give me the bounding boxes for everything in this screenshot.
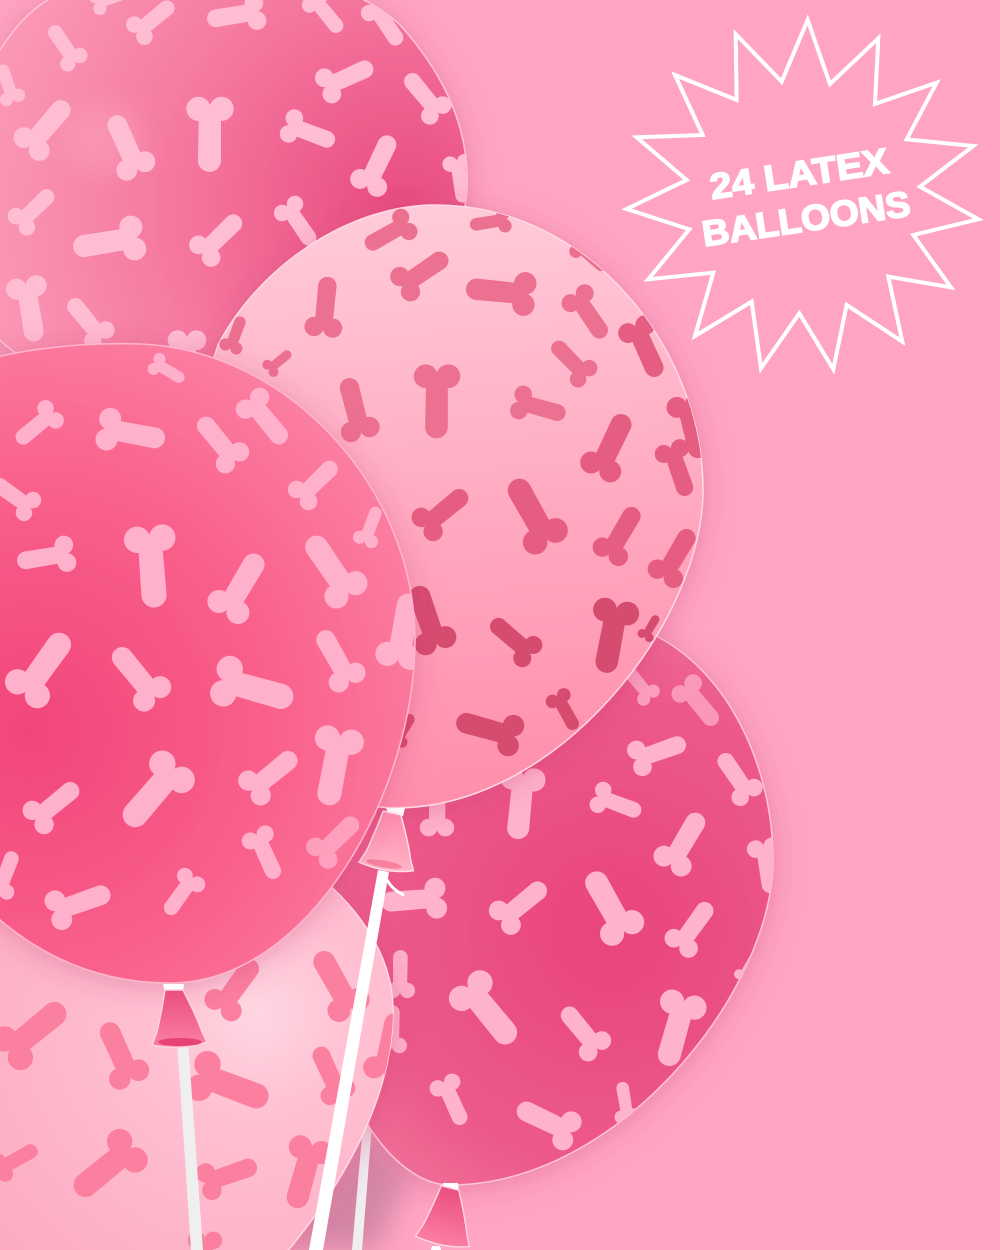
pattern: middle balloon top row — [218, 206, 619, 444]
pattern: middle balloon bottom row — [400, 586, 660, 756]
starburst badge — [627, 20, 978, 369]
balloon: top dark pink — [0, 0, 481, 357]
pattern: top balloon — [0, 0, 466, 352]
pattern: back balloon — [377, 660, 789, 1154]
balloon: middle light pink — [200, 205, 720, 808]
balloon: back right dark pink — [300, 633, 789, 1185]
knot: middle balloon — [359, 808, 424, 876]
highlight — [65, 105, 145, 175]
knot: back balloon — [415, 1183, 482, 1250]
badge text: 24 LATEX — [707, 140, 891, 207]
starburst outline — [627, 20, 978, 369]
stick: middle balloon — [309, 870, 389, 1250]
shadow under light balloon — [285, 1125, 410, 1250]
ribbon curl — [386, 878, 404, 895]
pattern: bottom left balloon — [0, 941, 417, 1250]
knot: front balloon — [152, 984, 207, 1047]
stick: front balloon — [177, 1040, 203, 1250]
balloon: bottom left light pink — [0, 887, 406, 1250]
balloon: front hot pink — [0, 344, 433, 983]
stick: back balloon — [352, 1125, 372, 1250]
pattern: middle balloon centre row — [408, 312, 720, 592]
pattern: front balloon — [0, 351, 433, 933]
badge text line 2: BALLOONS — [699, 183, 913, 254]
